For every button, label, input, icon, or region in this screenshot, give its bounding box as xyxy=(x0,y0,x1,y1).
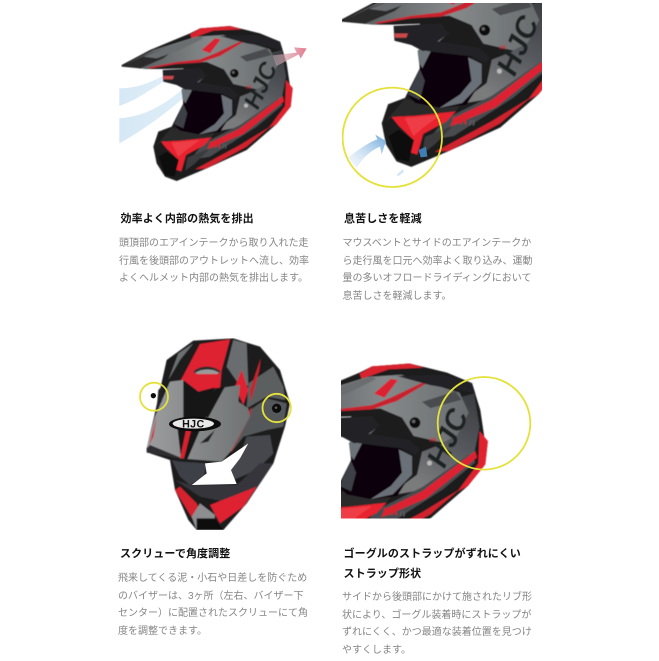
heading: strap ribs: ゴーグルのストラップがずれにくい xyxy=(344,548,521,560)
text block: exhaust: 頭頂部のエアインテークから取り入れた走 xyxy=(119,238,308,249)
callout circle: right screw xyxy=(262,394,291,422)
callout circle: rear ribs xyxy=(438,377,530,470)
text block: visor screws: 飛来してくる泥・小石や日差しを防ぐため xyxy=(118,573,307,584)
text block: breathing: 息苦しさを軽減します。 xyxy=(342,291,452,302)
text block: exhaust xyxy=(119,237,309,284)
visor xyxy=(147,380,250,462)
text block: breathing: マウスベントとサイドのエアインテークか xyxy=(342,238,531,249)
helmet illustrations xyxy=(119,3,542,530)
callout circle: left screw xyxy=(140,383,168,411)
arrow: exhaust outflow xyxy=(273,47,307,66)
text block: visor screws: 度を調整できます。 xyxy=(118,626,207,637)
heading: exhaust: 効率よく内部の熱気を排出 xyxy=(120,212,254,224)
text block: breathing xyxy=(342,238,532,302)
text block: strap ribs: 状により、ゴーグル装着時にストラップが xyxy=(342,610,531,621)
text block: strap ribs xyxy=(342,591,532,656)
text block: strap ribs: やすくします。 xyxy=(342,645,411,656)
panel: strap rib helmet image xyxy=(341,362,532,518)
panel: mouth vent helmet image xyxy=(342,0,559,187)
panel: visor screws helmet image xyxy=(140,338,291,530)
helmet side view crop xyxy=(341,362,489,518)
text block: strap ribs: ずれにくく、かつ最適な装着位置を見つけ xyxy=(342,627,532,638)
text block: breathing: 量の多いオフロードライディングにおいて xyxy=(342,273,532,284)
heading: strap ribs xyxy=(344,547,521,580)
heading: breathing: 息苦しさを軽減 xyxy=(344,212,422,224)
helmet front view: HJC xyxy=(182,419,204,431)
helmet side view enlarged xyxy=(342,0,559,167)
text block: strap ribs: サイドから後頭部にかけて施されたリブ形 xyxy=(342,592,532,603)
panel: exhaust helmet image xyxy=(119,26,307,181)
logo badge xyxy=(169,417,221,431)
heading: strap ribs: ストラップ形状 xyxy=(344,568,421,580)
icon: intake airflow ribbons xyxy=(119,75,183,143)
text block: breathing: ら走行風を口元へ効率よく取り込み、運動 xyxy=(342,256,532,267)
text block: visor screws xyxy=(118,572,308,637)
heading: visor screws: スクリューで角度調整 xyxy=(120,548,230,560)
text block: exhaust: よくヘルメット内部の熱気を排出します。 xyxy=(119,273,308,284)
text block: exhaust: 行風を後頭部のアウトレットへ流し、効率 xyxy=(119,256,309,267)
helmet side view xyxy=(122,26,293,181)
arrow: mouth airflow xyxy=(348,135,427,176)
text block: visor screws: センター）に配置されたスクリューにて角 xyxy=(118,608,308,619)
text block: visor screws: のバイザーは、3ヶ所（左右、バイザー下 xyxy=(118,591,304,602)
helmet front view xyxy=(147,338,290,530)
callout circle: mouth vent xyxy=(343,88,442,187)
padding and eye port xyxy=(172,460,207,485)
